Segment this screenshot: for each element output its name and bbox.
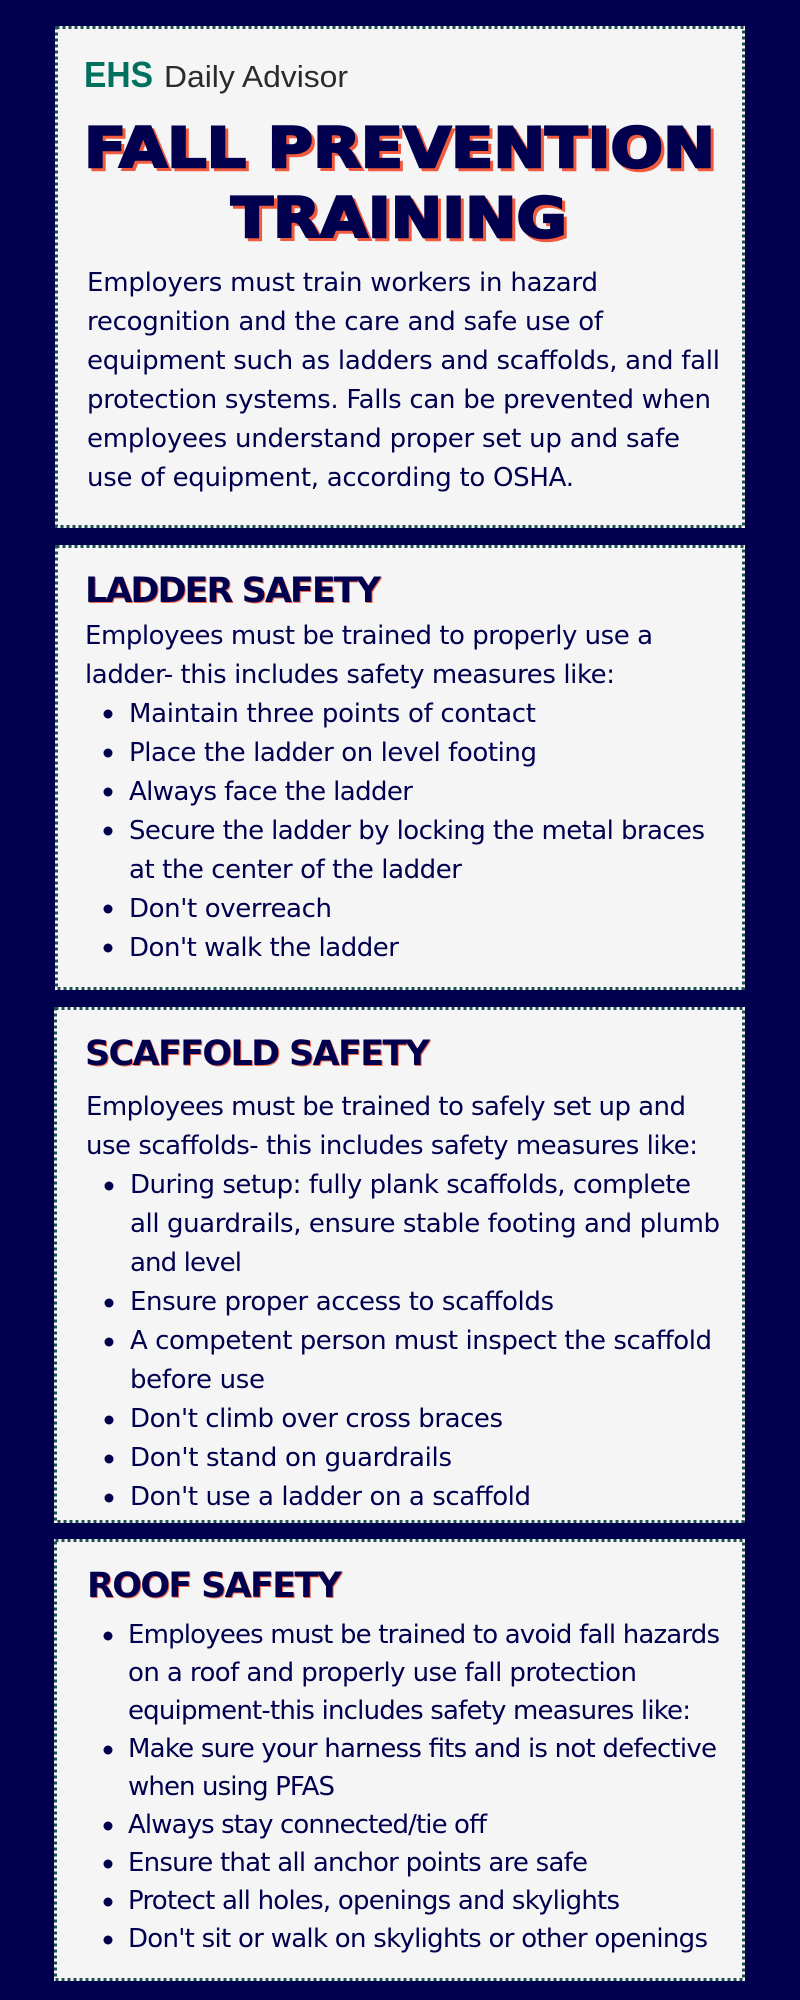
logo: EHS Daily Advisor: EHS (84, 54, 153, 95)
scaffold bullet list: During setup: fully plank scaffolds, complete (130, 1170, 691, 1200)
title (84, 116, 715, 250)
roof bullet list: when using PFAS (128, 1772, 335, 1802)
intro paragraph (87, 268, 720, 493)
title: FALL PREVENTION (84, 116, 715, 180)
scaffold bullet list: before use (130, 1365, 265, 1395)
panel: introduction (56, 28, 744, 526)
panel: ladder safety (56, 546, 744, 988)
scaffold bullet list (104, 1170, 720, 1512)
ladder bullet list: Don't walk the ladder (129, 933, 399, 963)
ladder bullet list: Place the ladder on level footing (129, 738, 537, 768)
heading: scaffold safety: SCAFFOLD SAFETY (85, 1034, 431, 1074)
scaffold bullet list: Don't use a ladder on a scaffold (130, 1482, 531, 1512)
ladder bullet list: Always face the ladder (129, 777, 413, 807)
ladder bullet list: Secure the ladder by locking the metal braces (129, 816, 705, 846)
ladder intro text: Employees must be trained to properly use a (85, 621, 653, 651)
intro paragraph: employees understand proper set up and safe (87, 424, 680, 454)
panel: scaffold safety (56, 1008, 744, 1522)
roof bullet list: Always stay connected/tie off (128, 1810, 488, 1840)
roof bullet list: equipment-this includes safety measures like: (128, 1696, 691, 1726)
scaffold bullet list: Don't climb over cross braces (130, 1404, 503, 1434)
roof bullet list: on a roof and properly use fall protection (128, 1658, 637, 1688)
title: TRAINING (231, 186, 567, 250)
scaffold bullet list: Ensure proper access to scaffolds (130, 1287, 554, 1317)
heading: ladder safety: LADDER SAFETY (85, 571, 382, 611)
roof bullet list (104, 1620, 720, 1954)
roof bullet list: Employees must be trained to avoid fall hazards (128, 1620, 720, 1650)
heading: roof safety: ROOF SAFETY (87, 1566, 343, 1606)
roof bullet list: Ensure that all anchor points are safe (128, 1848, 588, 1878)
logo: EHS Daily Advisor: Daily Advisor (164, 59, 348, 94)
scaffold bullet list: A competent person must inspect the scaffold (130, 1326, 712, 1356)
scaffold intro text: use scaffolds- this includes safety measures like: (86, 1131, 698, 1161)
ladder bullet list (104, 699, 705, 963)
ladder bullet list: Don't overreach (129, 894, 332, 924)
ladder intro text: ladder- this includes safety measures like: (85, 660, 615, 690)
roof bullet list: Make sure your harness fits and is not defective (128, 1734, 717, 1764)
scaffold intro text: Employees must be trained to safely set up and (86, 1092, 686, 1122)
scaffold bullet list: Don't stand on guardrails (130, 1443, 452, 1473)
intro paragraph: Employers must train workers in hazard (87, 268, 598, 298)
ladder bullet list: Maintain three points of contact (129, 699, 536, 729)
roof bullet list: Don't sit or walk on skylights or other openings (128, 1924, 708, 1954)
scaffold bullet list: and level (130, 1248, 242, 1278)
intro paragraph: use of equipment, according to OSHA. (87, 463, 574, 493)
ladder bullet list: at the center of the ladder (129, 855, 462, 885)
scaffold bullet list: all guardrails, ensure stable footing and plumb (130, 1209, 720, 1239)
intro paragraph: equipment such as ladders and scaffolds, and fall (87, 346, 720, 376)
ladder intro text (85, 621, 653, 690)
roof bullet list: Protect all holes, openings and skylights (128, 1886, 620, 1916)
panel: roof safety (56, 1540, 744, 1980)
logo: EHS Daily Advisor (84, 54, 348, 95)
intro paragraph: recognition and the care and safe use of (87, 307, 604, 337)
scaffold intro text (86, 1092, 698, 1161)
intro paragraph: protection systems. Falls can be prevented when (87, 385, 711, 415)
